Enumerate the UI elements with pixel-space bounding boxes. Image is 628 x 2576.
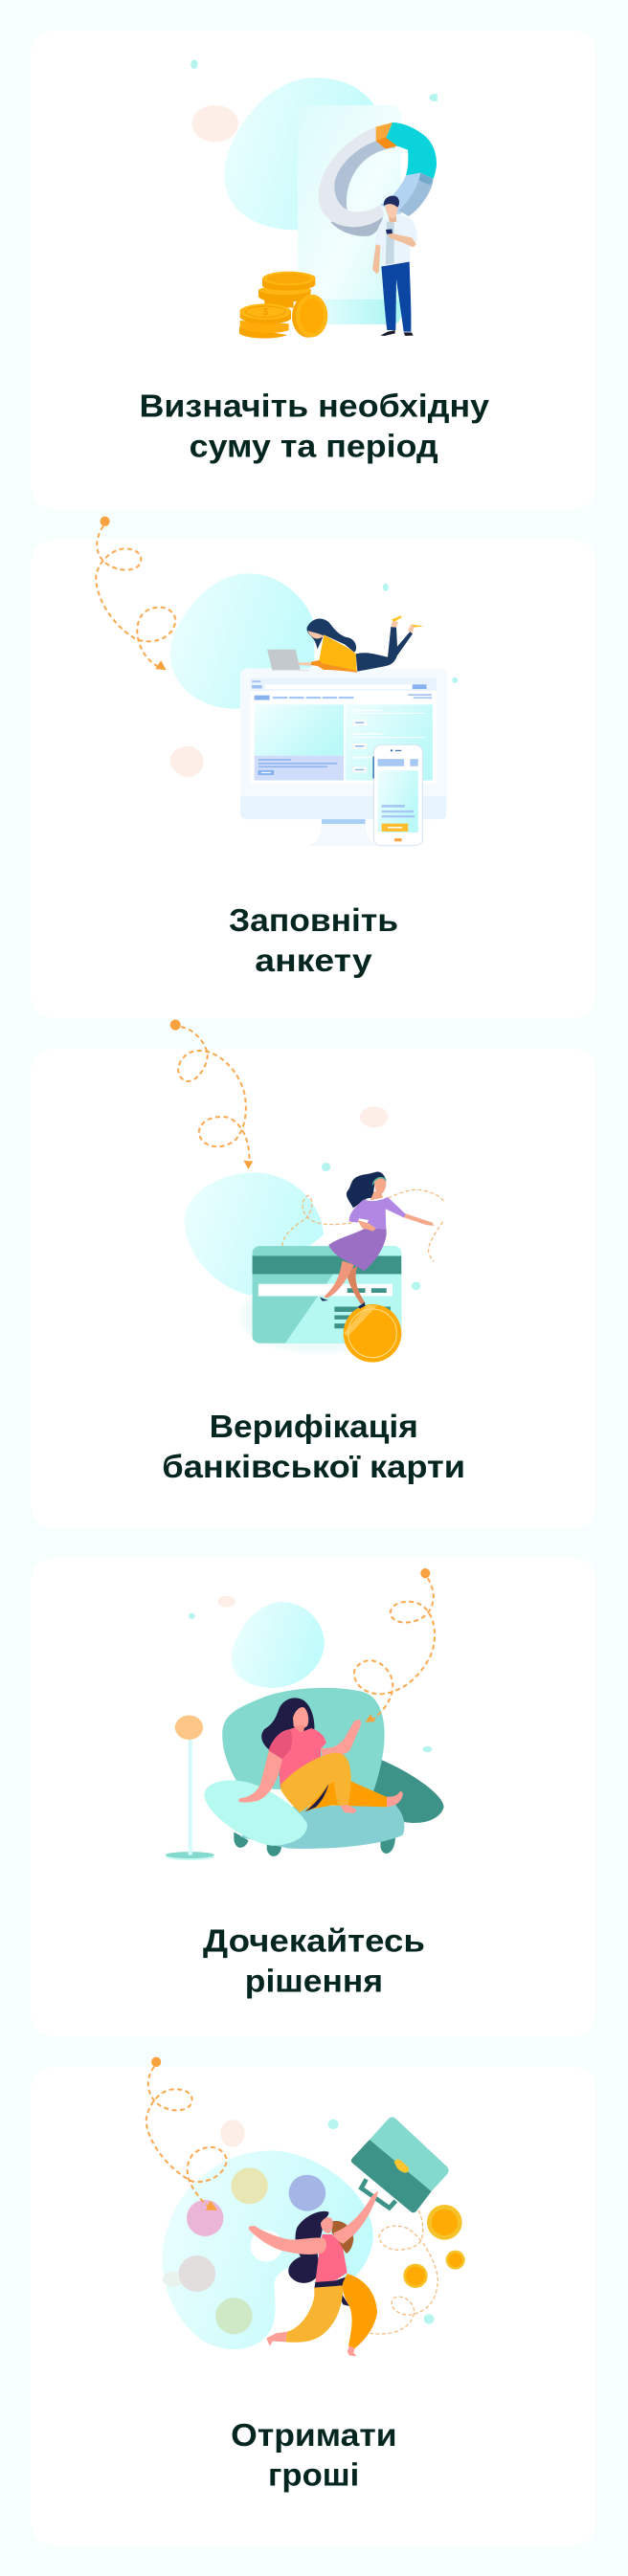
gold coin: [344, 1304, 401, 1363]
decorative blobs: [170, 573, 458, 777]
heading: step 2: Заповніть: [229, 902, 398, 938]
heading: step 4: [203, 1922, 425, 1998]
heading: step 2: анкету: [255, 943, 372, 978]
illustration: monitor and phone: [96, 517, 458, 846]
heading: step 5: Отримати: [231, 2417, 397, 2453]
heading: step 4: рішення: [245, 1963, 383, 1998]
chart ring: [319, 122, 437, 236]
woman lying with laptop: [297, 615, 424, 673]
decorative dots and blobs: [191, 59, 437, 230]
thin dashed decoration: [370, 2210, 437, 2334]
card background: [31, 540, 596, 1018]
palette blob and paint dots: [162, 2120, 435, 2349]
briefcase: [351, 2117, 449, 2212]
panel: step 1: [31, 31, 596, 509]
coin stacks: [239, 272, 327, 339]
thin dashed decoration left: [282, 1195, 352, 1246]
soft shadow blob: [240, 1280, 400, 1353]
woman on gold coin: [320, 1171, 443, 1363]
heading: step 3: банківської карти: [162, 1449, 465, 1484]
panel: step 2: [31, 517, 596, 1018]
woman: [249, 2190, 378, 2356]
bank card: [253, 1246, 401, 1344]
chart ring and man: [319, 122, 437, 336]
decorative blobs: [189, 1596, 432, 1752]
dashed route arrow: [170, 1020, 253, 1169]
smartphone: [373, 744, 422, 846]
laptop: [267, 650, 309, 671]
heading: step 1: Визначіть необхідну: [140, 389, 490, 424]
illustration: blobs and bank card: [170, 1020, 420, 1353]
heading: step 5: [231, 2417, 397, 2493]
panel: step 3: [31, 1020, 596, 1528]
panel: step 4: [31, 1558, 596, 2036]
phone highlight stripe: [401, 148, 407, 180]
heading: step 5: гроші: [268, 2457, 359, 2493]
heading: step 2: [229, 902, 398, 978]
gold coins: [403, 2205, 465, 2288]
panel: step 5: [31, 2057, 596, 2545]
card background: [31, 2067, 596, 2545]
heading: step 4: Дочекайтесь: [203, 1922, 425, 1958]
illustration: lamp and armchair: [166, 1596, 444, 1860]
dollar sign on coin: $: [263, 307, 269, 318]
dashed route arrow: [96, 517, 175, 670]
thin dashed decoration right: [386, 1189, 443, 1261]
card background: [31, 1049, 596, 1528]
monitor: [240, 668, 446, 846]
heading: step 3: Верифікація: [210, 1409, 418, 1444]
jumping woman, briefcase and coins: [249, 2117, 465, 2356]
dashed route arrow: [354, 1568, 435, 1722]
illustration: palette and route: [146, 2057, 435, 2349]
phone: [298, 105, 401, 324]
armrest: [204, 1781, 307, 1846]
heading: step 1: суму та період: [190, 429, 438, 464]
left arm on armrest: [238, 1750, 282, 1803]
seated woman: [261, 1698, 403, 1813]
decorative blobs: [184, 1106, 420, 1296]
man with phone: [372, 196, 417, 336]
floor lamp: [166, 1716, 214, 1860]
heading: step 1: [140, 389, 490, 464]
card background: [31, 31, 596, 509]
card background: [31, 1558, 596, 2036]
armchair: [222, 1688, 444, 1856]
woman: [320, 1171, 434, 1309]
heading: step 3: [162, 1409, 465, 1484]
dashed route arrow: [146, 2057, 227, 2210]
